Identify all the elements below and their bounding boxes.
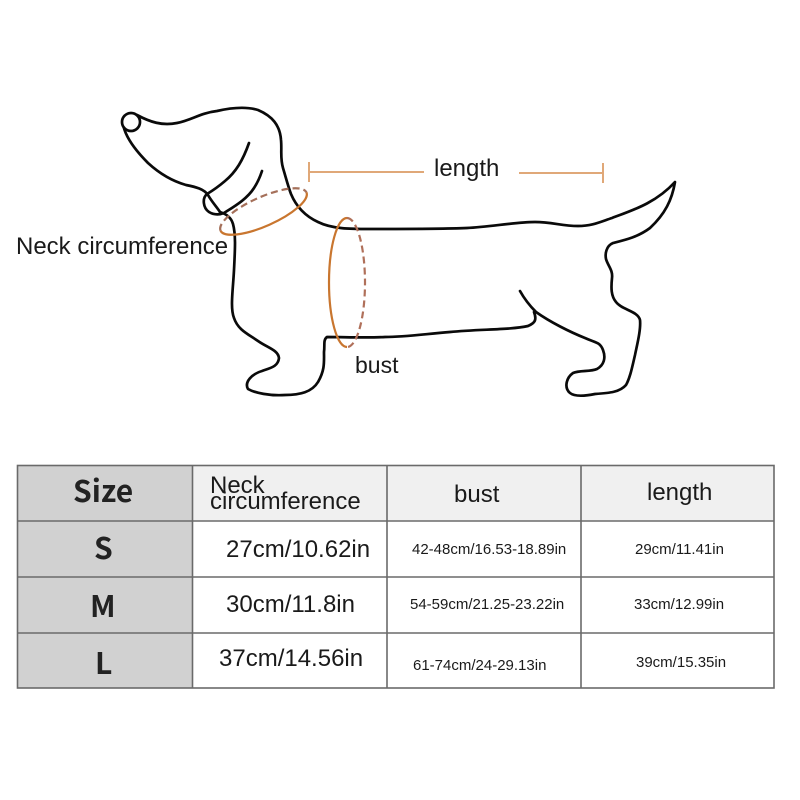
- row L: 61-74cm/24-29.13in: [413, 657, 546, 674]
- icon: nose: [122, 113, 140, 131]
- row S: S: [94, 524, 113, 568]
- row L: 37cm/14.56in: [219, 645, 363, 672]
- row M: M: [90, 582, 116, 626]
- label: length: length: [434, 155, 499, 182]
- length arrow: [309, 162, 603, 183]
- row M: 30cm/11.8in: [226, 591, 355, 618]
- row M: 33cm/12.99in: [634, 596, 724, 613]
- row M: [90, 582, 724, 626]
- label: bust: bust: [355, 352, 399, 378]
- row S: [94, 524, 724, 568]
- header row: [73, 467, 712, 515]
- neck measuring ellipse: [215, 179, 312, 244]
- row L: [95, 639, 726, 683]
- table backgrounds: [17, 465, 774, 688]
- row M: 54-59cm/21.25-23.22in: [410, 596, 564, 613]
- row S: 29cm/11.41in: [635, 541, 724, 558]
- header row: Size: [73, 467, 133, 511]
- label: neck circumference: Neck circumference: [16, 233, 228, 260]
- size table: [17, 465, 774, 688]
- table grid: [17, 465, 774, 688]
- header row: Neck: [210, 472, 266, 499]
- row L: 39cm/15.35in: [636, 654, 726, 671]
- row S: 27cm/10.62in: [226, 536, 370, 563]
- bust measuring ellipse: [329, 218, 365, 347]
- header row: length: [647, 479, 712, 506]
- dog body outline: [123, 108, 675, 396]
- dog diagram: [122, 108, 675, 396]
- row L: L: [95, 639, 112, 683]
- header row: bust: [454, 481, 500, 508]
- row S: 42-48cm/16.53-18.89in: [412, 541, 566, 558]
- header row: circumference: [210, 488, 361, 515]
